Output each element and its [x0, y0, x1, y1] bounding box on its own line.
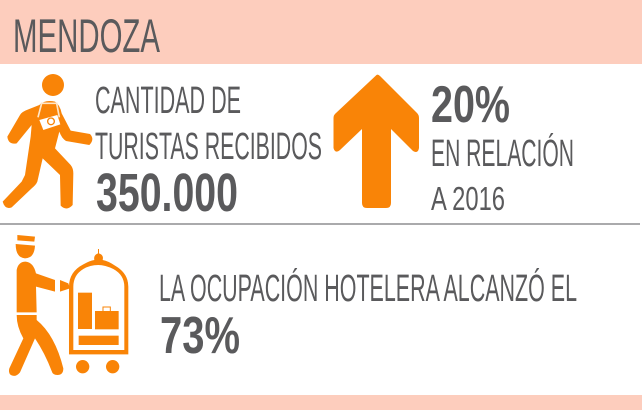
footer band	[0, 395, 642, 410]
text: tourists received: CANTIDAD DE	[95, 80, 241, 122]
text: twenty percent increase: A 2016	[431, 180, 505, 217]
text: hotel occupancy	[159, 267, 577, 365]
title: MENDOZA	[13, 9, 160, 62]
text: tourists received: TURISTAS RECIBIDOS	[95, 126, 322, 168]
number: tourists: 350.000	[96, 163, 238, 223]
header band	[0, 0, 642, 64]
number: occupancy: 73%	[160, 307, 240, 365]
icon: tourist with camera	[3, 74, 92, 208]
icon: bellhop with luggage cart	[9, 235, 128, 376]
icon: up arrow	[334, 75, 419, 208]
text: tourists received	[95, 80, 322, 223]
text: twenty percent increase: 20%	[431, 76, 510, 134]
text: twenty percent increase	[431, 76, 574, 217]
